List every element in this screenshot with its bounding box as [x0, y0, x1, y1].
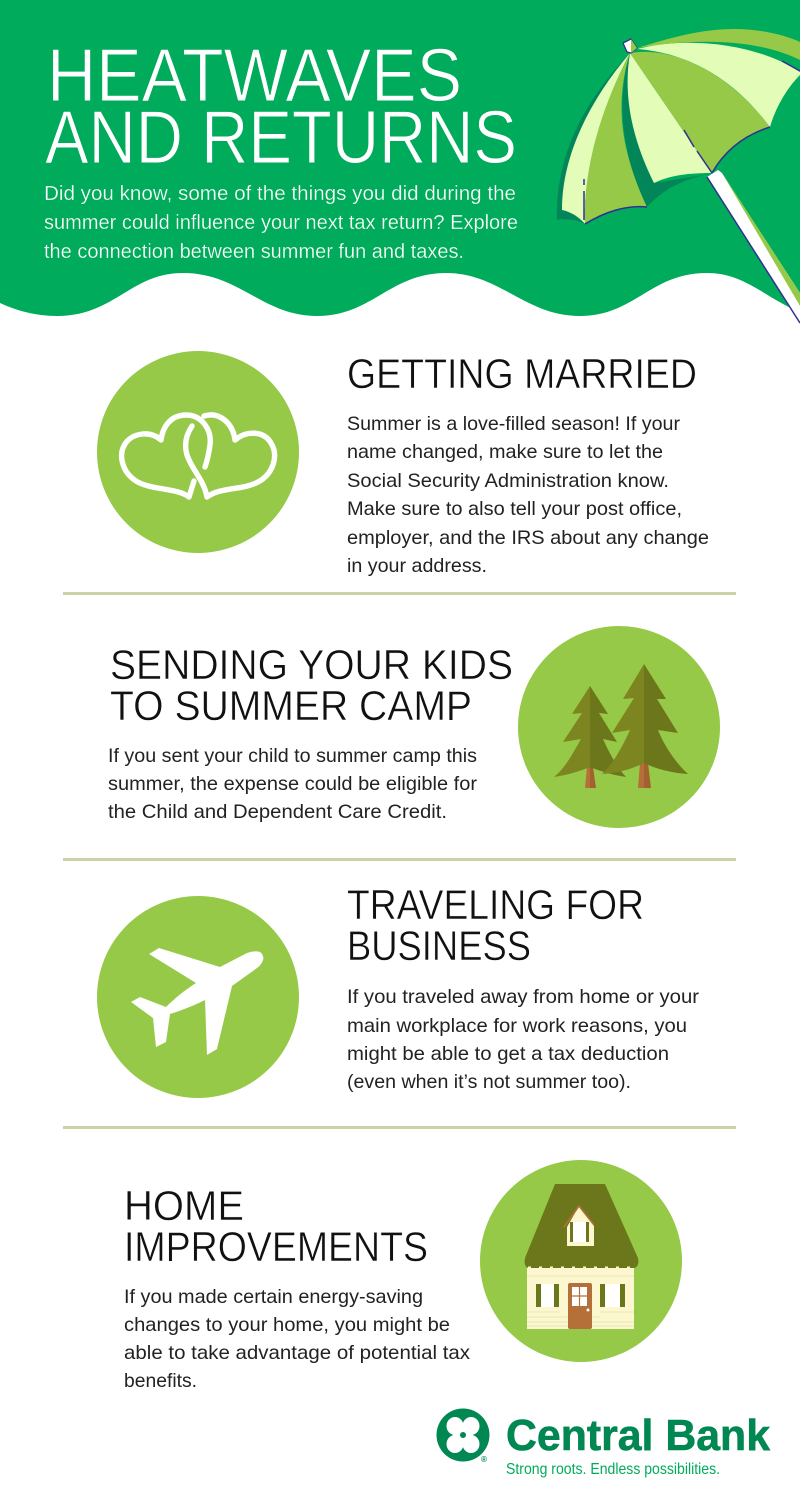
- icon: intertwined hearts: [97, 351, 299, 553]
- icon: dogwood flower badge: [436, 1408, 490, 1464]
- text: traveling for business: [347, 986, 700, 1093]
- heading: home improvements: IMPROVEMENTS: [124, 1223, 428, 1270]
- text: traveling for business: main workplace for work reasons, you: [347, 1015, 687, 1037]
- intro text: Did you know, some of the things you did during the: [44, 183, 516, 205]
- logo: Central Bank: [436, 1408, 771, 1478]
- icon: airplane: [97, 896, 299, 1098]
- icon: dogwood flower badge: ®: [481, 1455, 487, 1464]
- icon: house: [480, 1160, 682, 1362]
- title: HEATWAVES: [47, 33, 462, 117]
- icon: beach umbrella: [557, 29, 800, 323]
- text: getting married: Summer is a love-filled season! If your: [347, 413, 680, 435]
- heading: summer camp: SENDING YOUR KIDS: [110, 641, 513, 688]
- heading: traveling for business: [347, 881, 644, 969]
- text: home improvements: [124, 1286, 470, 1392]
- title: [45, 33, 517, 179]
- text: getting married: Make sure to also tell your post office,: [347, 498, 682, 520]
- panel: green wavy header background: [0, 0, 800, 316]
- text: getting married: [347, 413, 709, 577]
- text: getting married: employer, and the IRS about any change: [347, 527, 709, 549]
- title: AND RETURNS: [45, 95, 517, 179]
- tagline: Strong roots. Endless possibilities.: [506, 1461, 720, 1478]
- icon: pine trees: [518, 626, 720, 828]
- heading: summer camp: [110, 641, 513, 729]
- text: home improvements: able to take advantage of potential tax: [124, 1342, 470, 1364]
- wordmark: Central Bank: [506, 1411, 771, 1460]
- text: summer camp: summer, the expense could be eligible for: [108, 773, 478, 795]
- intro text: [44, 183, 518, 263]
- section: getting married: [97, 350, 709, 577]
- intro text: summer could influence your next tax return? Explore: [44, 212, 518, 234]
- text: getting married: name changed, make sure to let the: [347, 441, 663, 463]
- heading: home improvements: [124, 1182, 428, 1270]
- text: traveling for business: (even when it’s not summer too).: [347, 1071, 631, 1093]
- text: home improvements: If you made certain energy-saving: [124, 1286, 423, 1308]
- text: home improvements: changes to your home, you might be: [124, 1314, 450, 1336]
- text: summer camp: If you sent your child to summer camp this: [108, 745, 477, 767]
- heading: traveling for business: TRAVELING FOR: [347, 881, 644, 928]
- text: getting married: in your address.: [347, 555, 487, 577]
- heading: traveling for business: BUSINESS: [347, 922, 531, 969]
- section: traveling for business: [97, 881, 700, 1098]
- heading: getting married: GETTING MARRIED: [347, 350, 697, 397]
- text: home improvements: benefits.: [124, 1370, 197, 1392]
- text: traveling for business: If you traveled away from home or your: [347, 986, 700, 1008]
- intro text: the connection between summer fun and taxes.: [44, 241, 464, 263]
- text: summer camp: the Child and Dependent Care Credit.: [108, 801, 447, 823]
- section: home improvements: [124, 1160, 682, 1392]
- text: getting married: Social Security Administration know.: [347, 470, 669, 492]
- heading: home improvements: HOME: [124, 1182, 244, 1229]
- section: summer camp: [108, 626, 720, 828]
- text: traveling for business: might be able to get a tax deduction: [347, 1043, 669, 1065]
- heading: summer camp: TO SUMMER CAMP: [110, 682, 472, 729]
- text: summer camp: [108, 745, 478, 823]
